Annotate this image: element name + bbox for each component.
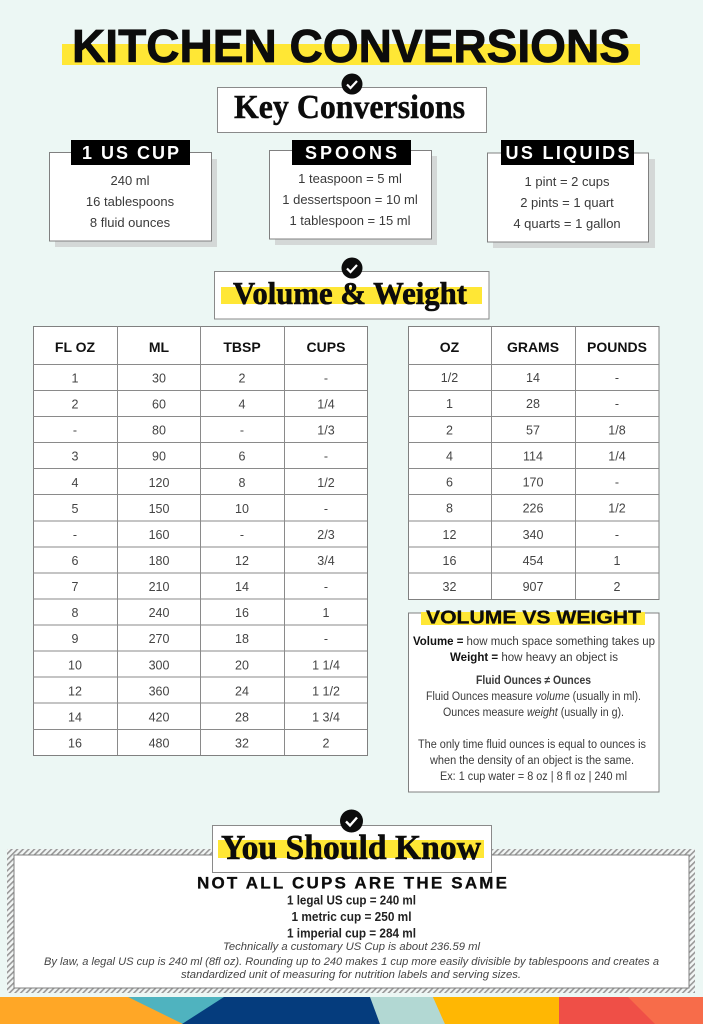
table rows: fluid volume: 420: [149, 710, 169, 724]
table rows: weight: [441, 371, 626, 594]
table header: fluid volume: CUPS: [307, 339, 345, 355]
table rows: fluid volume: 1 1/4: [312, 658, 340, 672]
table rows: weight: 114: [523, 450, 543, 464]
footnote: Technically a customary US Cup is about 236.59 ml: [223, 941, 481, 953]
table rows: fluid volume: 150: [149, 502, 169, 516]
table rows: fluid volume: 2/3: [317, 528, 335, 542]
table rows: fluid volume: 8: [72, 606, 79, 620]
table header: fluid volume: TBSP: [223, 339, 261, 355]
subheading: not all cups are the same: NOT ALL CUPS ARE THE SAME: [197, 874, 507, 892]
table rows: fluid volume: 270: [149, 632, 169, 646]
definitions: [413, 636, 655, 664]
cup sizes list: [287, 894, 416, 940]
panel: 1 us cup: 240 ml: [110, 173, 150, 188]
table rows: weight: 57: [526, 424, 540, 438]
table rows: fluid volume: 12: [235, 554, 249, 568]
definitions: Volume = how much space something takes up: [413, 636, 655, 648]
table rows: fluid volume: 10: [68, 658, 82, 672]
table rows: weight: 907: [523, 580, 543, 594]
table rows: weight: 16: [443, 554, 456, 568]
table rows: fluid volume: 3/4: [317, 554, 335, 568]
panel: volume vs weight: [408, 608, 659, 792]
table rows: fluid volume: 6: [72, 554, 79, 568]
table rows: fluid volume: 60: [152, 398, 166, 412]
table rows: weight: 28: [526, 397, 540, 411]
panel: us liquids: 4 quarts = 1 gallon: [513, 216, 621, 231]
table header: weight: GRAMS: [507, 339, 559, 355]
table rows: weight: -: [615, 528, 619, 542]
heading: key conversions: Key Conversions: [234, 89, 465, 126]
table rows: weight: 4: [446, 450, 453, 464]
panel: spoons: [270, 140, 437, 245]
table rows: fluid volume: 28: [235, 710, 249, 724]
table header: fluid volume: FL OZ: [55, 339, 96, 355]
table rows: weight: 1/2: [441, 371, 458, 385]
table rows: fluid volume: 7: [72, 580, 79, 594]
table rows: fluid volume: 80: [152, 424, 166, 438]
table rows: weight: -: [615, 397, 619, 411]
panel: us liquids: [488, 140, 655, 248]
table rows: weight: 1: [446, 397, 453, 411]
table rows: fluid volume: 12: [68, 684, 82, 698]
panel: you should know: [7, 810, 695, 993]
table rows: weight: 1: [614, 554, 621, 568]
table rows: fluid volume: 20: [235, 658, 249, 672]
cup sizes list: 1 metric cup = 250 ml: [292, 910, 412, 924]
table rows: fluid volume: 16: [235, 606, 249, 620]
panel: volume vs weight: VOLUME VS WEIGHT: [426, 608, 641, 628]
density note: [418, 739, 646, 783]
table rows: weight: 170: [523, 476, 543, 490]
table rows: fluid volume: 4: [72, 476, 79, 490]
table rows: fluid volume: -: [324, 450, 328, 464]
table rows: weight: 6: [446, 476, 453, 490]
table rows: weight: 454: [523, 554, 543, 568]
density note: Ex: 1 cup water = 8 oz | 8 fl oz | 240 ml: [440, 771, 627, 783]
panel: us liquids: 2 pints = 1 quart: [520, 195, 614, 210]
table rows: weight: 1/2: [608, 502, 626, 516]
fluid ounces note: Fluid Ounces measure volume (usually in ml).: [426, 691, 641, 703]
fluid ounces note: Ounces measure weight (usually in g).: [443, 707, 624, 719]
table rows: fluid volume: -: [240, 424, 244, 438]
table rows: fluid volume: 4: [239, 398, 246, 412]
heading: key conversions: [218, 74, 486, 132]
table rows: fluid volume: 3: [72, 450, 79, 464]
table rows: fluid volume: 1: [323, 606, 330, 620]
table rows: fluid volume: 2: [323, 736, 330, 750]
panel: us liquids: US LIQUIDS: [506, 143, 630, 163]
table rows: fluid volume: 90: [152, 450, 166, 464]
panel: spoons: SPOONS: [305, 143, 397, 163]
table header: fluid volume: [55, 339, 345, 355]
panel: 1 us cup: [50, 140, 217, 247]
table rows: fluid volume: 24: [235, 684, 249, 698]
table rows: fluid volume: 210: [149, 580, 169, 594]
table rows: fluid volume: -: [73, 424, 77, 438]
table rows: weight: 2: [446, 424, 453, 438]
table rows: weight: 340: [523, 528, 543, 542]
table header: weight: POUNDS: [587, 339, 647, 355]
table rows: fluid volume: 160: [149, 528, 169, 542]
table rows: fluid volume: -: [324, 372, 328, 386]
table rows: fluid volume: 32: [235, 736, 249, 750]
table rows: weight: 14: [526, 371, 540, 385]
table rows: weight: 2: [614, 580, 621, 594]
panel: 1 us cup: 16 tablespoons: [86, 194, 175, 209]
table rows: fluid volume: 9: [72, 632, 79, 646]
footnote: standardized unit of measuring for nutrition labels and serving sizes.: [181, 969, 521, 981]
table rows: fluid volume: 1 1/2: [312, 684, 340, 698]
table rows: fluid volume: 360: [149, 684, 169, 698]
table rows: fluid volume: 1 3/4: [312, 710, 340, 724]
table rows: fluid volume: 1: [72, 372, 79, 386]
table rows: fluid volume: 10: [235, 502, 249, 516]
panel: spoons: 1 teaspoon = 5 ml: [298, 171, 402, 186]
fluid ounces note: [426, 675, 641, 719]
table rows: weight: -: [615, 371, 619, 385]
table: fluid volume: [33, 326, 368, 756]
table: weight: [408, 326, 659, 600]
table rows: fluid volume: 16: [68, 736, 82, 750]
table rows: fluid volume: 300: [149, 658, 169, 672]
footnote: [44, 941, 659, 981]
heading: you should know: You Should Know: [221, 828, 482, 867]
table header: weight: [440, 339, 647, 355]
table rows: weight: 12: [443, 528, 456, 542]
panel: spoons: 1 dessertspoon = 10 ml: [282, 192, 418, 207]
table rows: fluid volume: [68, 372, 340, 750]
table rows: fluid volume: 120: [149, 476, 169, 490]
table rows: fluid volume: 6: [239, 450, 246, 464]
decorative colour band: [0, 997, 703, 1024]
table rows: fluid volume: -: [73, 528, 77, 542]
table rows: fluid volume: 14: [68, 710, 82, 724]
table rows: weight: 1/4: [608, 450, 626, 464]
table rows: fluid volume: -: [240, 528, 244, 542]
table rows: weight: 32: [443, 580, 456, 594]
table rows: fluid volume: 180: [149, 554, 169, 568]
fluid ounces note: Fluid Ounces ≠ Ounces: [476, 675, 591, 687]
table rows: fluid volume: 8: [239, 476, 246, 490]
panel: us liquids: 1 pint = 2 cups: [525, 174, 610, 189]
cup sizes list: 1 legal US cup = 240 ml: [287, 894, 416, 908]
table rows: fluid volume: 1/4: [317, 398, 335, 412]
table rows: weight: 1/8: [608, 424, 626, 438]
title: KITCHEN CONVERSIONS: [72, 20, 630, 72]
table rows: fluid volume: 1/2: [317, 476, 335, 490]
table rows: weight: -: [615, 476, 619, 490]
footnote: By law, a legal US cup is 240 ml (8fl oz). Rounding up to 240 makes 1 cup more easily divisible by tablespoons and creates a: [44, 956, 659, 968]
table rows: fluid volume: -: [324, 502, 328, 516]
table rows: weight: 226: [523, 502, 543, 516]
heading: volume and weight: Volume & Weight: [233, 275, 467, 311]
cup sizes list: 1 imperial cup = 284 ml: [287, 926, 416, 940]
definitions: Weight = how heavy an object is: [450, 652, 618, 664]
density note: The only time fluid ounces is equal to ounces is: [418, 739, 646, 751]
table rows: fluid volume: 240: [149, 606, 169, 620]
table rows: fluid volume: -: [324, 632, 328, 646]
table rows: fluid volume: 2: [239, 372, 246, 386]
table rows: fluid volume: 480: [149, 736, 169, 750]
table rows: weight: 8: [446, 502, 453, 516]
table header: weight: OZ: [440, 339, 460, 355]
heading: volume and weight: [214, 258, 489, 319]
panel: spoons: 1 tablespoon = 15 ml: [289, 213, 411, 228]
panel: 1 us cup: 1 US CUP: [82, 143, 179, 163]
table rows: fluid volume: 30: [152, 372, 166, 386]
density note: when the density of an object is the same.: [429, 755, 634, 767]
table header: fluid volume: ML: [149, 339, 170, 355]
table rows: fluid volume: -: [324, 580, 328, 594]
panel: 1 us cup: 8 fluid ounces: [90, 215, 171, 230]
table rows: fluid volume: 1/3: [317, 424, 335, 438]
heading: you should know: [212, 810, 492, 872]
table rows: fluid volume: 2: [72, 398, 79, 412]
table rows: fluid volume: 14: [235, 580, 249, 594]
table rows: fluid volume: 5: [72, 502, 79, 516]
table rows: fluid volume: 18: [235, 632, 249, 646]
